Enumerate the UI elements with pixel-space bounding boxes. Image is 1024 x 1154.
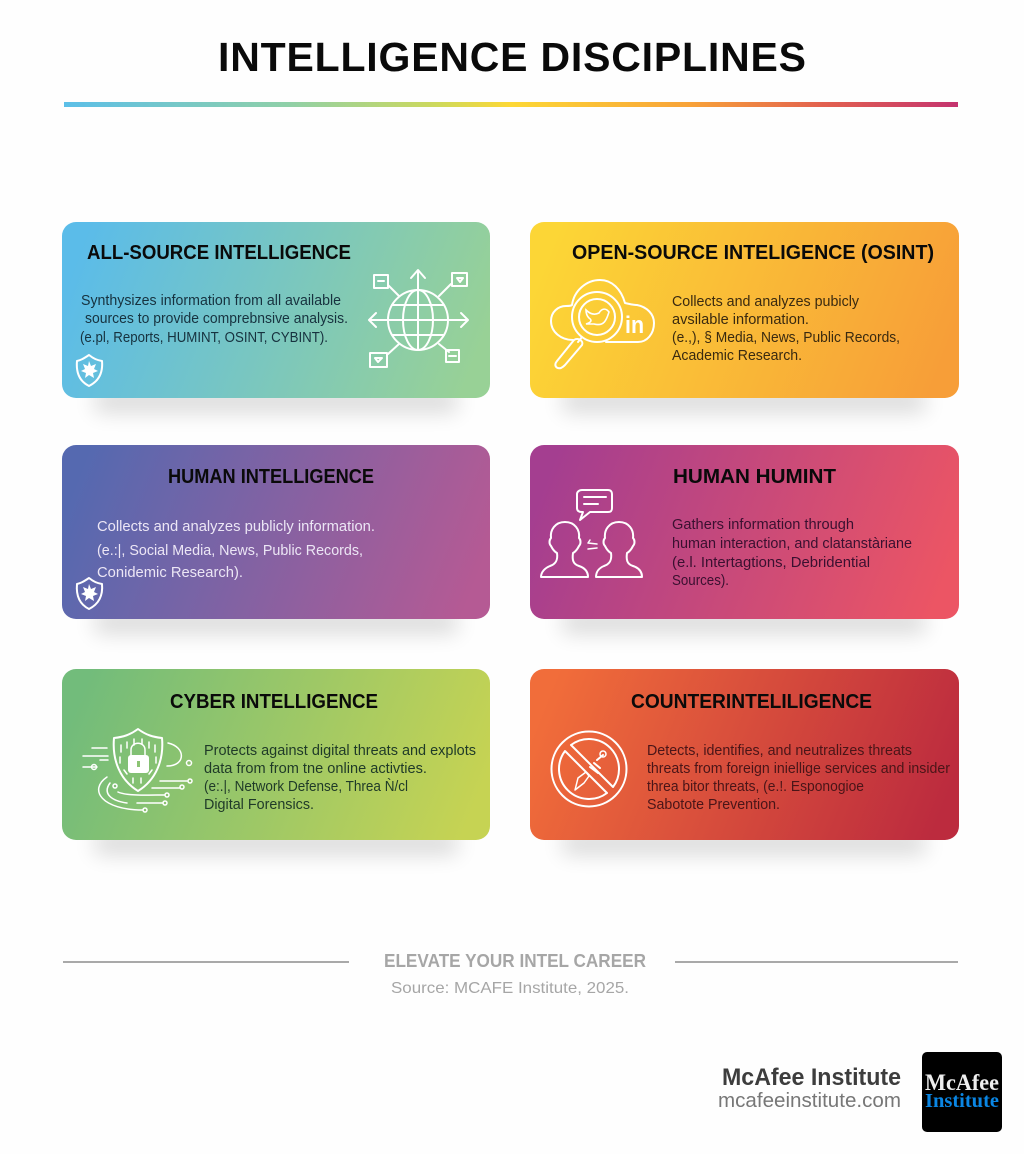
text block: humint description: human interaction, and clatanstàriane [672,536,912,552]
brand name: McAfee Institute [722,1064,901,1091]
text block: counterintelligence description: threats from foreign iniellige services and insider [647,761,950,777]
text block: human intelligence description: Conidemic Research). [97,565,243,581]
text block: cyber description: Protects against digital threats and explots [204,743,476,759]
text block: OSINT description [672,294,900,364]
text block: cyber description: Digital Forensics. [204,797,314,813]
icon: cloud with magnifier and social logos: in [625,312,644,339]
icon: prohibited dagger [552,732,626,806]
footer heading: ELEVATE YOUR INTEL CAREER [384,951,646,971]
panel: human intelligence [62,445,490,633]
heading: cyber intelligence: CYBER INTELLIGENCE [170,691,378,713]
logo [922,1052,1002,1132]
text block: OSINT description: Academic Research. [672,348,802,364]
panel: cyber intelligence [62,669,490,854]
brand url: mcafeeinstitute.com [718,1090,901,1112]
text block: all-source description: sources to provide comprebnsive analysis. [85,311,348,327]
text block: OSINT description: Collects and analyzes pubicly [672,294,860,310]
text block: all-source description [80,293,348,346]
text block: counterintelligence description: Detects, identifies, and neutralizes threats [647,743,912,759]
text block: counterintelligence description: Sabotote Prevention. [647,797,780,813]
heading: human humint: HUMAN HUMINT [673,466,836,488]
text block: OSINT description: (e.,), § Media, News, Public Records, [672,330,900,346]
text block: humint description [672,517,912,589]
text block: human intelligence description: (e.:|, Social Media, News, Public Records, [97,543,363,559]
icon: shield with padlock and circuits [83,729,192,812]
panel: counterintelligence [530,669,959,854]
title: INTELLIGENCE DISCIPLINES [218,34,806,80]
footer divider left [63,961,349,963]
heading: counterintelligence: COUNTERINTELILIGENCE [631,691,872,713]
footer divider right [675,961,958,963]
icon: two people talking [541,490,642,577]
text block: counterintelligence description: threa bitor threats, (e.!. Esponogioe [647,779,864,795]
text block: OSINT description: avsilable information. [672,312,809,328]
panel: open-source intelligence [530,222,959,412]
icon: cloud with magnifier and social logos [551,280,654,368]
text block: counterintelligence description [647,743,950,813]
icon: globe with data arrows [369,270,468,367]
text block: human intelligence description: Collects and analyzes publicly information. [97,519,375,535]
text block: cyber description: data from from tne online activties. [204,761,427,777]
text block: humint description: Gathers information through [672,517,854,533]
icon: shield badge [77,355,102,386]
gradient title rule [64,102,958,107]
text block: humint description: (e.l. Intertagtions, Debridential [672,555,870,571]
text block: humint description: Sources). [672,573,729,589]
logo: Institute [925,1090,999,1112]
heading: all-source intelligence: ALL-SOURCE INTELLIGENCE [87,242,351,264]
heading: human intelligence: HUMAN INTELLIGENCE [168,466,374,488]
text block: all-source description: (e.pl, Reports, HUMINT, OSINT, CYBINT). [80,330,328,346]
heading: open-source intelligence: OPEN-SOURCE INTELIGENCE (OSINT) [572,242,934,264]
text block: cyber description: (e:.|, Network Defense, Threa Ǹ/cl [204,778,408,795]
text block: human intelligence description [97,519,375,581]
panel: all-source intelligence [62,222,490,412]
icon: shield badge [77,578,102,609]
source line: Source: MCAFE Institute, 2025. [391,980,629,997]
text block: cyber description [204,743,476,813]
text block: all-source description: Synthysizes information from all available [81,293,341,309]
panel: human humint [530,445,959,633]
logo: McAfee [925,1070,999,1095]
